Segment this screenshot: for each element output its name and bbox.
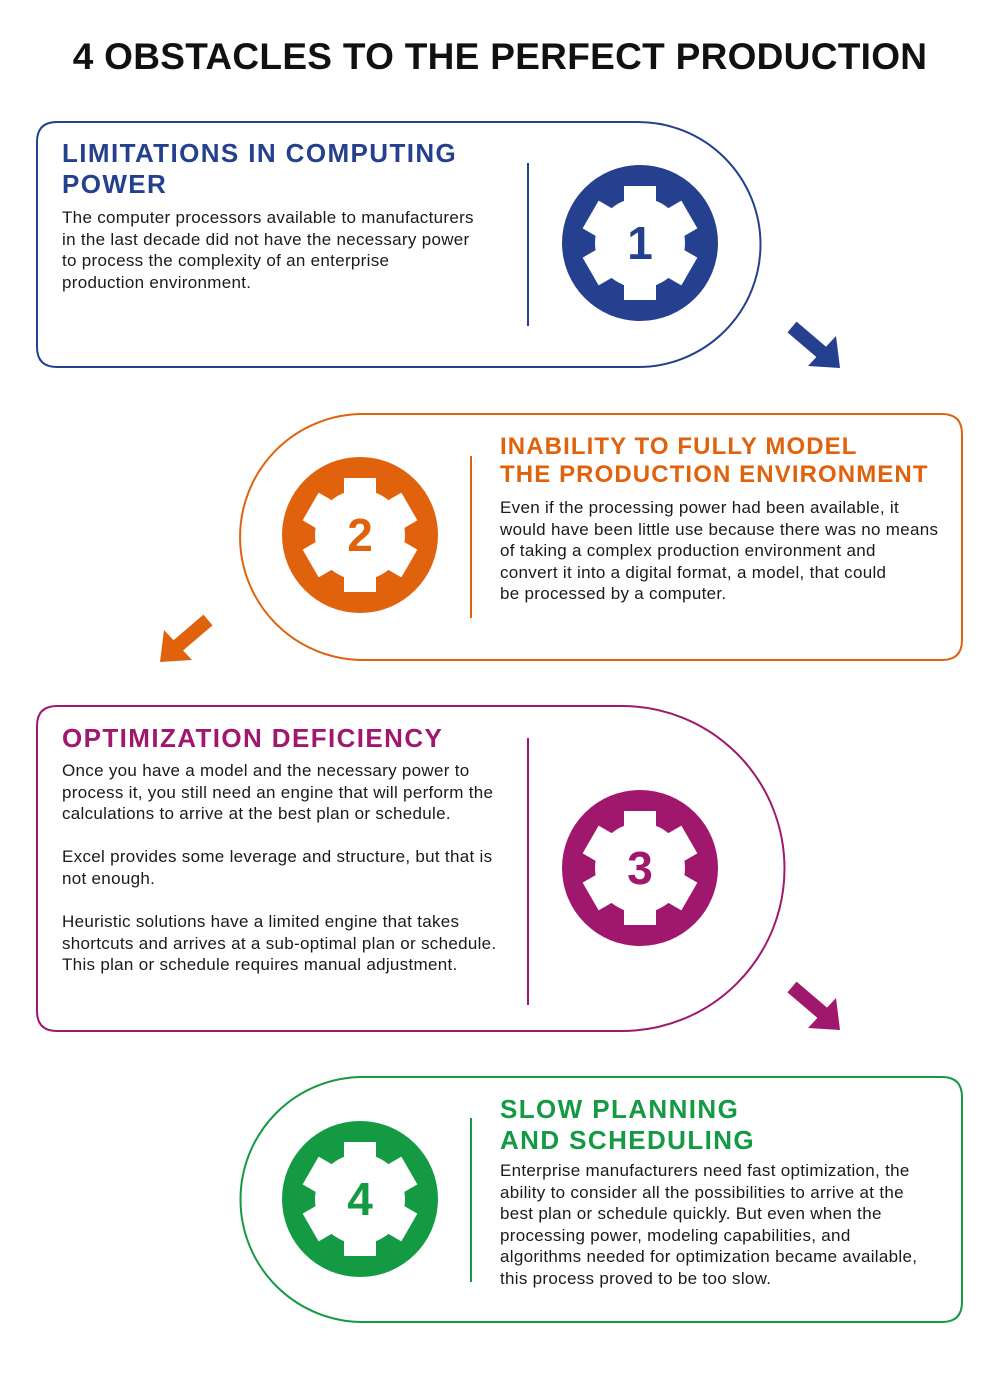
- card 4 outline: [240, 1077, 962, 1322]
- text 3: This plan or schedule requires manual adjustment.: [62, 955, 458, 974]
- text 3: Excel provides some leverage and structure, but that is: [62, 847, 492, 866]
- text 2: Even if the processing power had been available, it: [500, 498, 899, 517]
- heading 2: [500, 433, 929, 488]
- text 1: [62, 208, 474, 292]
- text 2: be processed by a computer.: [500, 584, 726, 603]
- text 4: algorithms needed for optimization became available,: [500, 1247, 917, 1266]
- text 4: best plan or schedule quickly. But even when the: [500, 1204, 882, 1223]
- title: 4 OBSTACLES TO THE PERFECT PRODUCTION: [73, 36, 927, 77]
- heading 4: [500, 1094, 755, 1155]
- text 4: [500, 1161, 917, 1288]
- heading 1: LIMITATIONS IN COMPUTING: [62, 138, 457, 168]
- icon: gear 3: 3: [627, 842, 653, 894]
- text 3: process it, you still need an engine that will perform the: [62, 783, 493, 802]
- text 3: not enough.: [62, 869, 155, 888]
- text 4: processing power, modeling capabilities, and: [500, 1226, 851, 1245]
- text 1: to process the complexity of an enterprise: [62, 251, 389, 270]
- heading 2: INABILITY TO FULLY MODEL: [500, 433, 858, 460]
- icon: gear 1: 1: [627, 217, 653, 269]
- icon: gear 2: [282, 457, 438, 613]
- text 3: Once you have a model and the necessary power to: [62, 761, 470, 780]
- text 2: of taking a complex production environment and: [500, 541, 876, 560]
- text 1: in the last decade did not have the necessary power: [62, 230, 470, 249]
- icon: gear 4: [282, 1121, 438, 1277]
- arrow 1: [792, 327, 840, 368]
- heading 3: OPTIMIZATION DEFICIENCY: [62, 723, 443, 753]
- heading 4: SLOW PLANNING: [500, 1094, 739, 1124]
- icon: gear 2: 2: [347, 509, 373, 561]
- text 4: Enterprise manufacturers need fast optimization, the: [500, 1161, 910, 1180]
- text 4: ability to consider all the possibilities to arrive at the: [500, 1183, 904, 1202]
- text 2: [500, 498, 938, 603]
- text 3: [62, 761, 496, 974]
- text 1: The computer processors available to manufacturers: [62, 208, 474, 227]
- text 2: would have been little use because there was no means: [500, 520, 938, 539]
- icon: gear 4: 4: [347, 1173, 373, 1225]
- heading 1: [62, 138, 457, 199]
- card 1 outline: [37, 122, 760, 367]
- heading 2: THE PRODUCTION ENVIRONMENT: [500, 461, 929, 488]
- arrow 2: [160, 620, 208, 662]
- text 1: production environment.: [62, 273, 251, 292]
- card 3 outline: [37, 706, 784, 1031]
- arrow 3: [792, 987, 840, 1030]
- text 2: convert it into a digital format, a model, that could: [500, 563, 886, 582]
- icon: gear 3: [562, 790, 718, 946]
- heading 4: AND SCHEDULING: [500, 1125, 755, 1155]
- text 3: shortcuts and arrives at a sub-optimal plan or schedule.: [62, 934, 496, 953]
- icon: gear 1: [562, 165, 718, 321]
- heading 1: POWER: [62, 169, 167, 199]
- text 4: this process proved to be too slow.: [500, 1269, 771, 1288]
- text 3: Heuristic solutions have a limited engine that takes: [62, 912, 459, 931]
- card 2 outline: [240, 414, 962, 660]
- text 3: calculations to arrive at the best plan or schedule.: [62, 804, 451, 823]
